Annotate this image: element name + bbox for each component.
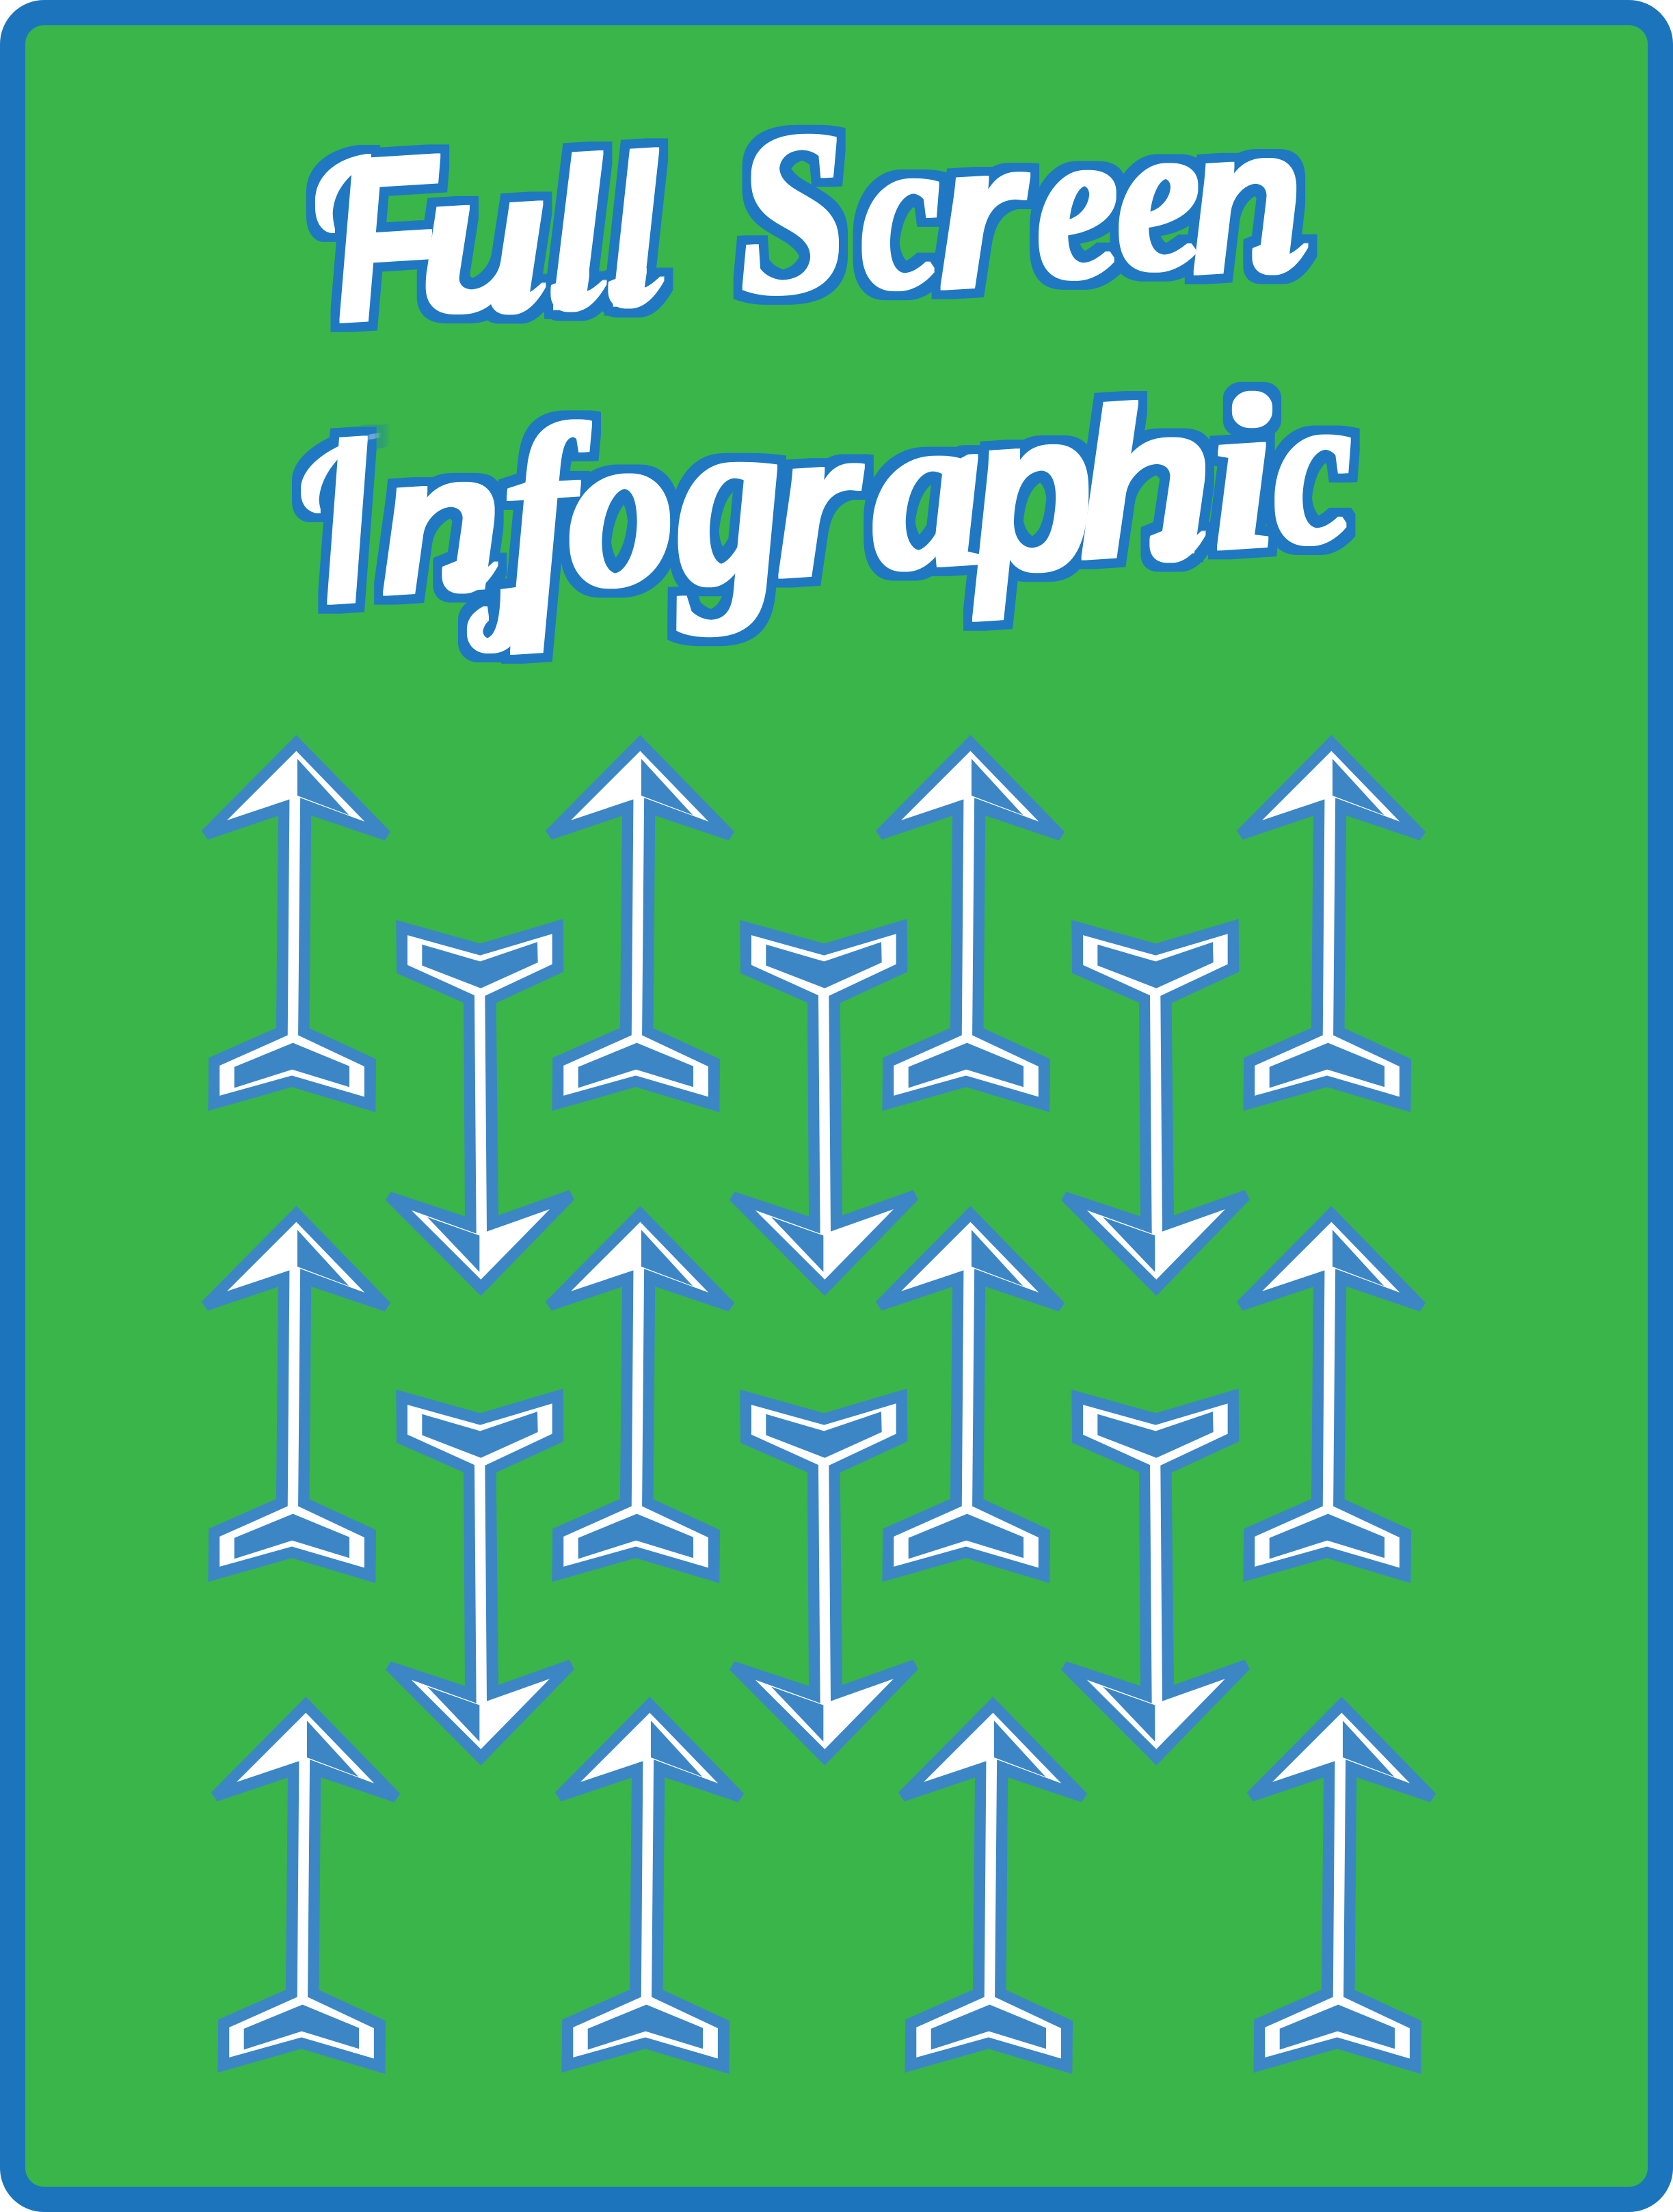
title line 2: Infographic: p — [956, 362, 1101, 623]
up arrow row 2 col 4 — [1237, 1206, 1426, 1583]
title line 2: Infographic: f — [494, 375, 606, 654]
down arrow row 2 col 2 — [730, 1388, 918, 1766]
title line 2: Infographic: r — [765, 392, 873, 619]
title line 2: Infographic: o — [558, 377, 682, 637]
down arrow row 2 col 3 — [1061, 1388, 1250, 1766]
title line 2: Infographic: c — [1263, 343, 1361, 593]
title line 2: Infographic: I — [312, 387, 379, 653]
up arrow row 2 col 2 — [546, 1206, 734, 1583]
title line 1: Full Screen: l — [540, 114, 614, 353]
up arrow row 2 col 3 — [876, 1206, 1065, 1583]
arrow grid — [202, 735, 1436, 2074]
title line 1: Full Screen: F — [325, 106, 453, 370]
up arrow row 3 col 1 — [211, 1697, 400, 2074]
title line 1: Full Screen: r — [928, 99, 1039, 332]
up arrow row 1 col 2 — [546, 735, 734, 1112]
down arrow row 1 col 2 — [730, 919, 918, 1296]
title line 1: Full Screen: n — [1181, 83, 1310, 316]
title — [303, 72, 1361, 654]
title line 1: Full Screen — [317, 72, 1310, 370]
up arrow row 1 col 4 — [1237, 735, 1426, 1112]
up arrow row 2 col 1 — [202, 1206, 390, 1583]
down arrow row 1 col 3 — [1061, 919, 1250, 1296]
down arrow row 2 col 1 — [386, 1388, 574, 1766]
title line 1: Full Screen: e — [1027, 79, 1126, 327]
title line 2: Infographic: n — [370, 409, 509, 635]
title line 1: Full Screen: S — [728, 80, 855, 345]
title line 2: Infographic — [303, 343, 1361, 654]
title line 2: Infographic: i — [1200, 349, 1284, 597]
down arrow row 1 col 1 — [386, 919, 574, 1296]
up arrow row 3 col 4 — [1247, 1697, 1436, 2074]
title line 1: Full Screen: u — [410, 130, 554, 355]
title line 2: Infographic: a — [861, 360, 991, 619]
title line 2: Infographic: h — [1067, 360, 1221, 603]
title line 1: Full Screen: e — [1107, 72, 1208, 318]
up arrow row 1 col 3 — [876, 735, 1065, 1112]
title line 2: Infographic: g — [658, 358, 792, 639]
title line 1: Full Screen: c — [851, 85, 949, 338]
title line 1: Full Screen: l — [600, 111, 669, 350]
up arrow row 1 col 1 — [202, 735, 390, 1112]
up arrow row 3 col 3 — [898, 1697, 1087, 2074]
up arrow row 3 col 2 — [555, 1697, 744, 2074]
